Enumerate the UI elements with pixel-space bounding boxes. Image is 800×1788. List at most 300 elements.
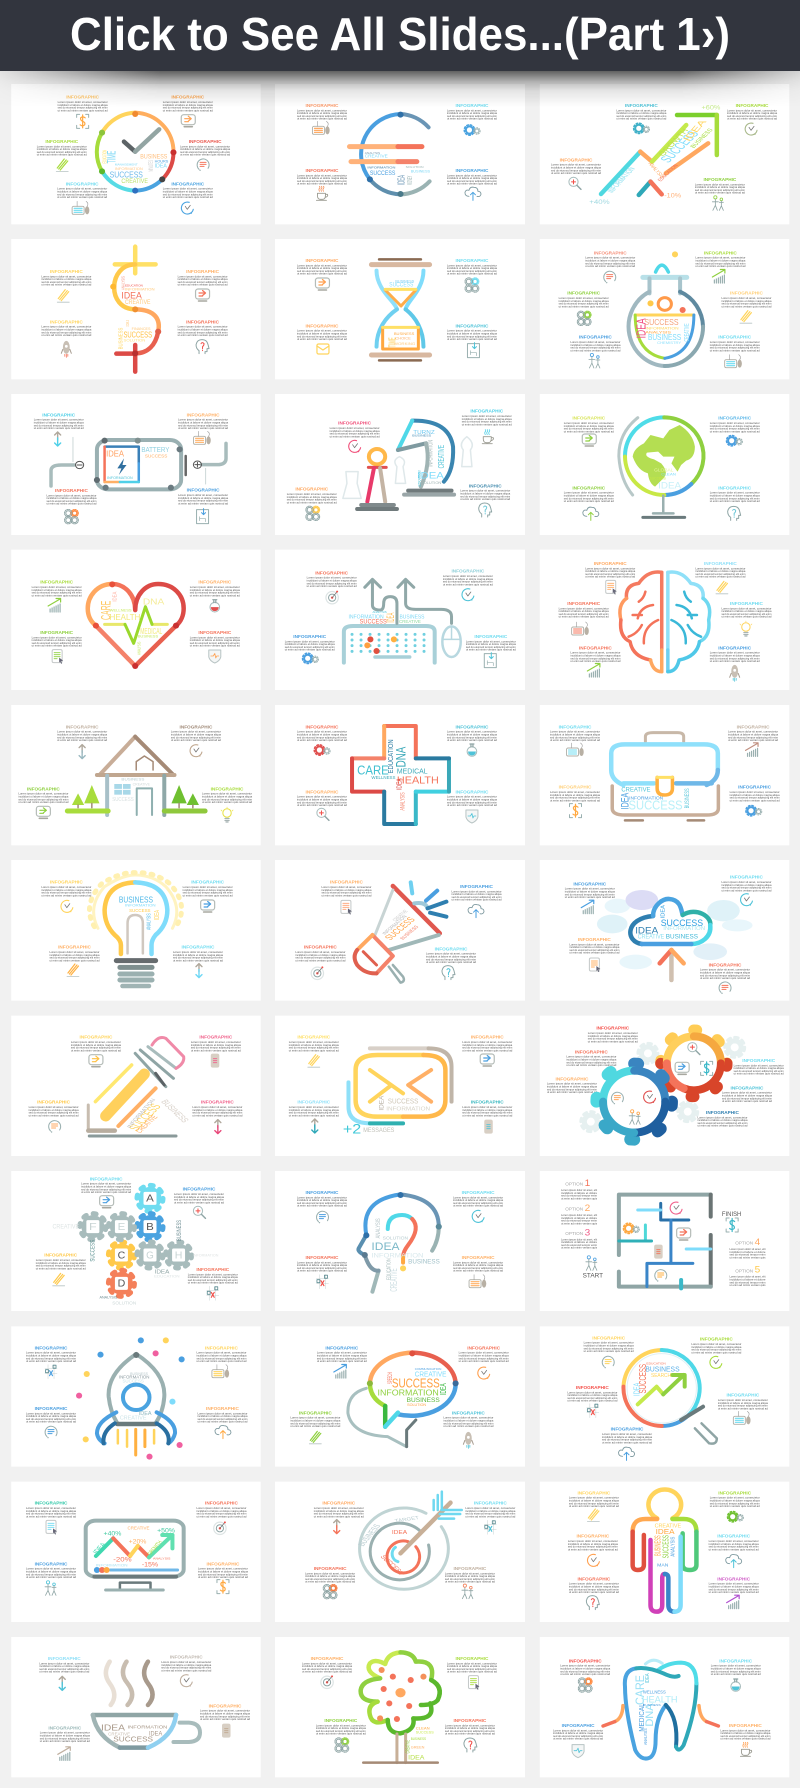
text block: INFOGRAPHIC	[211, 786, 244, 791]
panel: dollar slide	[11, 239, 261, 379]
word cloud: CREATIVE	[415, 1370, 446, 1379]
icon: head	[728, 506, 741, 520]
brain shape	[620, 572, 710, 672]
icon: people	[462, 1584, 473, 1599]
text block	[465, 1501, 516, 1518]
word cloud	[119, 896, 162, 930]
text block	[700, 962, 751, 980]
text block: INFOGRAPHIC	[90, 1176, 123, 1181]
icon: clock	[190, 745, 202, 757]
word cloud: CREATIVE	[134, 1114, 160, 1134]
text block	[453, 1255, 504, 1273]
text block	[447, 724, 498, 742]
word cloud: INFORMATION	[378, 1389, 439, 1398]
text block	[26, 1501, 77, 1518]
text block	[41, 269, 92, 287]
text block: INFOGRAPHIC	[718, 416, 752, 421]
word cloud: TARGET	[394, 1516, 420, 1524]
icon: monitor	[100, 1196, 114, 1208]
text block	[445, 1718, 495, 1736]
rocket	[76, 1337, 185, 1460]
text block	[34, 412, 84, 430]
panel: briefcase slide	[540, 705, 789, 845]
text block	[710, 335, 760, 352]
text block	[171, 724, 222, 742]
word cloud: BUSINESS	[655, 1535, 663, 1556]
icon: tic tac toe	[207, 1286, 219, 1300]
text block	[462, 1035, 513, 1052]
icon: pencil	[587, 1509, 599, 1521]
text block: INFOGRAPHIC	[66, 724, 99, 729]
icon: monitor	[582, 434, 596, 446]
text block	[559, 291, 609, 308]
text block: INFOGRAPHIC	[456, 103, 489, 108]
text block: INFOGRAPHIC	[209, 1703, 242, 1708]
icon: clock	[462, 589, 474, 601]
word cloud	[357, 739, 439, 811]
text block: INFOGRAPHIC	[325, 1345, 359, 1350]
word cloud: SOLUTION	[407, 1403, 426, 1408]
text block	[569, 937, 620, 955]
icon: chart	[581, 900, 594, 914]
text block	[460, 483, 511, 501]
text block	[40, 1725, 90, 1743]
text block	[57, 724, 108, 742]
icon: pencil	[57, 290, 69, 302]
word cloud: BUSINESS	[399, 925, 421, 941]
word cloud	[649, 469, 682, 491]
icon: head	[464, 1738, 477, 1752]
gear B	[137, 1214, 163, 1240]
icon: clock	[741, 894, 752, 906]
text block	[447, 323, 498, 341]
word cloud: INFORMATION	[645, 326, 679, 331]
icon: shield	[466, 810, 478, 823]
panel: heart slide	[11, 550, 261, 690]
text block: INFOGRAPHIC	[578, 937, 611, 942]
text block: INFOGRAPHIC	[594, 561, 627, 566]
icon: gear	[726, 435, 742, 446]
text block: INFOGRAPHIC	[456, 724, 489, 729]
word cloud: STRATEGY	[416, 470, 422, 487]
flask shape	[629, 251, 703, 366]
text block	[39, 1656, 90, 1674]
icon: monitor	[675, 1062, 689, 1074]
word cloud	[119, 1372, 152, 1421]
text block: INFOGRAPHIC	[35, 1406, 68, 1411]
text block	[709, 1576, 759, 1594]
text block	[466, 634, 516, 652]
word cloud: EDUCATION	[386, 1258, 391, 1280]
word cloud: CREATIVE	[392, 909, 410, 923]
text block: INFOGRAPHIC	[717, 1534, 751, 1539]
text block	[289, 1100, 339, 1117]
word cloud: EDUCATION	[646, 1362, 666, 1365]
word cloud: IDEA	[660, 904, 667, 918]
word cloud: IDEA	[154, 910, 162, 920]
word cloud: CREATIVE	[120, 1415, 147, 1421]
text block: INFOGRAPHIC	[314, 1566, 347, 1571]
text block	[711, 1658, 761, 1676]
icon: notebook	[484, 1120, 493, 1134]
text block: INFOGRAPHIC	[50, 880, 83, 885]
word cloud	[343, 1095, 430, 1136]
text block: INFOGRAPHIC	[469, 483, 502, 488]
icon: cloud	[215, 1425, 231, 1439]
word cloud: IDEA	[379, 1095, 386, 1111]
text block: INFOGRAPHIC	[80, 1035, 113, 1040]
word cloud: +40%	[104, 1530, 121, 1537]
icon: clock	[478, 1367, 490, 1379]
icon: magnifier	[193, 1206, 205, 1218]
word cloud: CARE	[634, 1675, 647, 1705]
icon: notebook	[654, 1245, 663, 1259]
icon: maze	[467, 343, 479, 358]
labels	[583, 1211, 741, 1279]
word cloud: WELLNESS	[371, 776, 395, 781]
text block	[58, 95, 108, 112]
text block	[316, 1718, 366, 1736]
figure	[633, 1489, 696, 1612]
text block	[297, 323, 348, 341]
icon: monitor	[196, 289, 210, 301]
text block: INFOGRAPHIC	[577, 1576, 611, 1581]
icon: arrows	[334, 1520, 340, 1534]
icon: pencil	[67, 964, 79, 976]
text block	[297, 789, 348, 807]
word cloud: CREATIVE	[53, 1223, 79, 1230]
panel: target slide	[275, 1482, 525, 1622]
word cloud	[589, 103, 721, 206]
word cloud: +40%	[589, 198, 610, 206]
icon: keyboard	[72, 201, 89, 214]
icon: cup	[316, 186, 328, 200]
gear C: C	[118, 1249, 125, 1261]
text block: INFOGRAPHIC	[297, 1035, 331, 1040]
panel: coffee cup slide	[11, 1637, 261, 1777]
word cloud: IDEA	[149, 1730, 163, 1737]
text block: INFOGRAPHIC	[700, 1337, 733, 1342]
text block	[190, 630, 240, 648]
icon: clock	[670, 1202, 682, 1214]
text block	[297, 1255, 348, 1273]
word cloud: +20%	[129, 1537, 147, 1545]
icon: pencil	[56, 159, 68, 171]
option 2: OPTION	[565, 1208, 583, 1212]
word cloud	[371, 1218, 440, 1292]
word cloud: IDEA	[92, 1542, 109, 1555]
panel: heart slide: MEDICAL	[140, 628, 162, 636]
word cloud: MONEY	[408, 176, 415, 185]
word cloud: WELLNESS	[110, 609, 132, 613]
text block	[710, 1490, 760, 1508]
word cloud: MAN	[657, 1564, 668, 1568]
word cloud: SUCCESS	[112, 796, 134, 803]
text block: INFOGRAPHIC	[40, 630, 74, 635]
word cloud: IDEA	[631, 1383, 642, 1396]
icon: cloud	[726, 1554, 742, 1568]
text block	[452, 884, 502, 902]
icon: target	[311, 966, 324, 980]
text block: INFOGRAPHIC	[738, 785, 772, 790]
text block	[565, 881, 615, 899]
icon: pencil	[53, 1273, 65, 1286]
text block: INFOGRAPHIC	[730, 291, 763, 296]
icon: chart	[746, 743, 758, 756]
gear B: B	[146, 1221, 154, 1232]
panel: puzzle gears slide	[11, 1171, 261, 1311]
text block: INFOGRAPHIC	[470, 409, 504, 414]
panel: pencil slide	[11, 1016, 261, 1156]
word cloud	[412, 429, 446, 487]
icon: cloud	[583, 507, 599, 520]
word cloud: IDEA	[371, 1241, 400, 1253]
text block: INFOGRAPHIC	[718, 645, 752, 650]
word cloud: BUSINESS	[394, 332, 414, 336]
word cloud: BUSINESS	[399, 615, 425, 620]
text block	[295, 945, 346, 962]
icon: arrows	[79, 745, 85, 759]
word cloud: IDEA	[106, 450, 125, 459]
word cloud: BUSINESS	[356, 1523, 383, 1547]
icon: chart	[727, 1595, 739, 1609]
word cloud: +60%	[702, 103, 721, 111]
text block: INFOGRAPHIC	[306, 1190, 339, 1195]
panel: human figure slide	[540, 1482, 789, 1622]
keyboard and mouse	[344, 579, 461, 663]
icon: gears	[465, 278, 479, 292]
gear D	[108, 1270, 134, 1296]
icon: magnifier	[688, 1043, 700, 1055]
text block	[447, 103, 498, 121]
word cloud: CREATIVE	[684, 323, 691, 342]
pale gears	[581, 1037, 745, 1132]
word cloud: DNA	[143, 597, 165, 607]
text block: INFOGRAPHIC	[186, 319, 220, 324]
word cloud: IDEA	[101, 1724, 125, 1733]
word cloud: BUSINESS	[407, 1396, 440, 1404]
icon: speech	[49, 1121, 61, 1133]
magnifier	[623, 1350, 717, 1444]
icon: monitor	[315, 278, 329, 290]
word cloud: HEALTH	[397, 774, 439, 786]
text block: INFOGRAPHIC	[718, 1490, 752, 1495]
option 3	[561, 1227, 598, 1250]
word cloud: COMMUNICATION	[415, 1368, 442, 1371]
word cloud: IDEA	[397, 778, 404, 790]
word cloud	[102, 150, 169, 185]
icon: shield	[572, 1745, 584, 1758]
icon: monitor	[201, 900, 215, 912]
icon: keyboard	[572, 622, 589, 635]
word cloud: ANALYSIS	[670, 1537, 677, 1557]
word cloud: CREATIVE	[436, 445, 446, 468]
icon: pencil	[716, 581, 728, 594]
text block: INFOGRAPHIC	[742, 1058, 776, 1063]
word cloud: ANALYSIS	[136, 641, 141, 655]
text block: INFOGRAPHIC	[304, 945, 337, 950]
text block: INFOGRAPHIC	[311, 1656, 344, 1661]
icon: chart	[712, 269, 725, 283]
word cloud: GROWTH	[146, 1540, 164, 1556]
text block: INFOGRAPHIC	[704, 561, 737, 566]
text block: INFOGRAPHIC	[206, 1406, 239, 1411]
briefcase shape	[611, 733, 718, 820]
word cloud: +50%	[157, 1526, 175, 1534]
text block	[290, 1410, 341, 1428]
row group 1	[11, 84, 789, 224]
text block: INFOGRAPHIC	[306, 103, 339, 108]
text block	[178, 269, 228, 287]
text block: INFOGRAPHIC	[35, 1561, 68, 1566]
gear D: D	[118, 1277, 125, 1289]
text block: INFOGRAPHIC	[171, 181, 205, 186]
text block	[695, 561, 746, 579]
word cloud: BUSINESS	[138, 635, 158, 639]
text block: INFOGRAPHIC	[726, 1393, 760, 1398]
word cloud: BUSINESS	[119, 896, 153, 905]
panel: gears slide	[540, 1016, 789, 1156]
text block: INFOGRAPHIC	[189, 139, 222, 144]
text block: INFOGRAPHIC	[579, 645, 612, 650]
gear G: G	[146, 1249, 154, 1261]
chess pieces	[343, 421, 472, 509]
word cloud: SUCCESS	[661, 917, 703, 928]
text block	[710, 645, 760, 663]
text block	[26, 1406, 77, 1424]
text block: INFOGRAPHIC	[452, 1410, 485, 1415]
icon: monitor	[36, 806, 50, 818]
text block: INFOGRAPHIC	[460, 884, 494, 889]
gear G	[137, 1242, 163, 1268]
text block	[180, 139, 231, 157]
head shape	[358, 1192, 442, 1292]
icon: gears	[323, 1584, 337, 1599]
icon: people	[589, 353, 600, 368]
icon: tic tac toe	[316, 1275, 328, 1289]
text block: INFOGRAPHIC	[453, 1566, 487, 1571]
text block	[196, 1501, 247, 1518]
text block	[289, 1035, 339, 1052]
text block	[584, 1335, 634, 1353]
word cloud: SUCCESS	[113, 1735, 153, 1744]
word cloud: INFORMATION	[371, 1251, 423, 1259]
word cloud: CLEAN	[661, 473, 676, 476]
icon: pencil	[740, 311, 752, 323]
word cloud	[619, 785, 691, 812]
option 5	[729, 1264, 766, 1287]
text block	[453, 1190, 504, 1208]
text block: INFOGRAPHIC	[435, 946, 468, 951]
word cloud: IDEA	[656, 1528, 675, 1536]
text block: INFOGRAPHIC	[576, 1534, 610, 1539]
text block	[426, 946, 477, 964]
text block: INFOGRAPHIC	[453, 1718, 487, 1723]
text block	[37, 139, 87, 157]
text block: INFOGRAPHIC	[592, 1335, 626, 1340]
text block	[695, 250, 746, 268]
word cloud: GOALS	[124, 320, 130, 327]
maze	[619, 1195, 711, 1288]
icon: gears	[306, 506, 320, 521]
icon: arrows	[59, 1676, 65, 1690]
row group 5	[11, 1171, 789, 1467]
word cloud: IDEA	[395, 175, 407, 185]
text block: INFOGRAPHIC	[576, 1385, 609, 1390]
text block	[41, 319, 92, 337]
text block: INFOGRAPHIC	[456, 258, 489, 263]
text block: INFOGRAPHIC	[191, 880, 225, 885]
text block	[57, 181, 108, 199]
text block	[568, 1534, 618, 1551]
icon: target	[326, 591, 338, 604]
text block: INFOGRAPHIC	[170, 1655, 203, 1660]
text block: INFOGRAPHIC	[295, 487, 329, 492]
word cloud: IDEA	[392, 1530, 408, 1536]
tooth shape	[603, 1660, 718, 1759]
text block: INFOGRAPHIC	[456, 789, 489, 794]
text block: INFOGRAPHIC	[572, 485, 606, 490]
word cloud: CHOICE	[395, 336, 411, 340]
word cloud: IDEA	[112, 591, 119, 602]
header bar	[0, 0, 800, 71]
gear F	[80, 1214, 106, 1240]
hourglass shape	[371, 259, 430, 360]
word cloud: INFORMATION	[125, 288, 155, 292]
icon: cloud	[465, 187, 481, 200]
word cloud: BUSINESS	[648, 334, 681, 342]
word cloud: SUCCESS	[360, 618, 387, 625]
word cloud	[356, 1516, 420, 1576]
gear E: E	[118, 1221, 126, 1232]
text block: INFOGRAPHIC	[730, 875, 763, 880]
option 3: OPTION	[565, 1232, 583, 1237]
text block	[18, 786, 69, 804]
text block	[585, 561, 636, 579]
word cloud: CREATIVE	[621, 785, 651, 793]
text block: INFOGRAPHIC	[559, 724, 592, 729]
word cloud: BUSINESS	[140, 152, 168, 160]
word cloud: -20%	[113, 1555, 132, 1563]
word cloud: SUCCESS	[383, 916, 418, 942]
icon: gear	[634, 123, 650, 134]
text block: INFOGRAPHIC	[471, 1100, 504, 1105]
icon: magnifier	[317, 808, 329, 820]
word cloud: SOLUTION	[406, 165, 424, 169]
word cloud: BUSINESS	[645, 1365, 680, 1374]
panel: battery slide	[11, 394, 261, 535]
text block: INFOGRAPHIC	[559, 785, 592, 790]
word cloud: CREATIVE	[108, 1732, 130, 1737]
word cloud: BUSINESS	[411, 170, 430, 174]
word cloud	[378, 1368, 448, 1408]
word cloud: SUCCESS	[644, 318, 679, 327]
word cloud: CARE	[99, 601, 114, 620]
text block	[569, 1490, 619, 1508]
icon: gears	[578, 1678, 592, 1692]
panel: globe slide	[540, 394, 789, 535]
text block: INFOGRAPHIC	[562, 1723, 595, 1728]
text block	[602, 1427, 653, 1444]
text block: INFOGRAPHIC	[322, 1501, 356, 1506]
option 5: 5	[755, 1264, 760, 1275]
icon: head	[479, 503, 492, 517]
word cloud: EDUCATION	[657, 163, 680, 183]
text block: INFOGRAPHIC	[737, 724, 770, 729]
text block	[443, 1410, 494, 1428]
text block: INFOGRAPHIC	[474, 634, 508, 639]
text block: INFOGRAPHIC	[198, 580, 232, 585]
